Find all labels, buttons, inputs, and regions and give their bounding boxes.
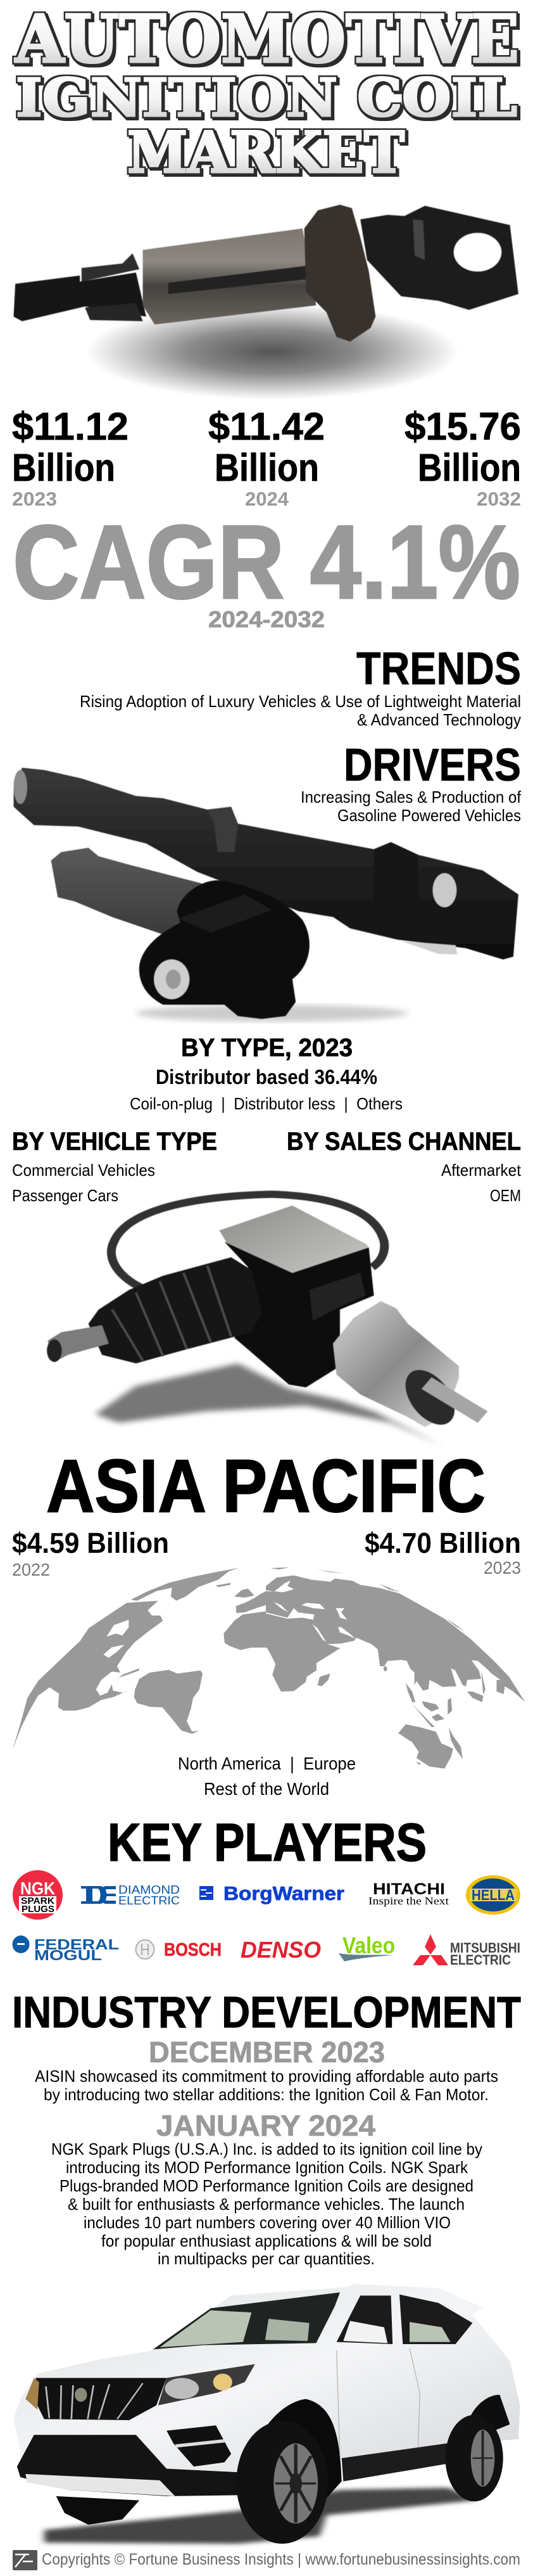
development: December 2023: by introducing two stellar additions: the Ignition Coil & Fan Motor. (44, 2085, 489, 2104)
development: December 2023 (35, 2036, 498, 2104)
key players heading: KEY PLAYERS (108, 1813, 427, 1872)
title: IGNITION COIL (16, 68, 517, 129)
logo: Diamond Electric (81, 1884, 180, 1907)
by type: Coil-on-plug | Distributor less | Others (130, 1094, 403, 1113)
image: white SUV (13, 2284, 520, 2544)
by vehicle type: Passenger Cars (12, 1186, 118, 1205)
stat: 2032: Billion (418, 446, 521, 489)
logo: Mitsubishi Electric: ELECTRIC (450, 1952, 511, 1968)
by vehicle type: BY VEHICLE TYPE (12, 1128, 217, 1156)
logo: Hella (466, 1875, 520, 1915)
logo: Federal Mogul (13, 1935, 119, 1963)
by vehicle type: Commercial Vehicles (12, 1161, 155, 1180)
by vehicle type (12, 1128, 217, 1205)
logo: NGK: NGK (20, 1878, 55, 1898)
by sales channel (287, 1128, 522, 1205)
development: January 2024: in multipacks per car quantities. (158, 2249, 375, 2268)
logo: Hitachi (368, 1880, 449, 1907)
development: January 2024: NGK Spark Plugs (U.S.A.) Inc. is added to its ignition coil line by (51, 2139, 482, 2158)
stat: 2023 (12, 405, 129, 510)
logo: Hitachi: HITACHI (373, 1880, 445, 1898)
development: January 2024: JANUARY 2024 (156, 2109, 375, 2142)
stat: 2032: 2032 (477, 488, 521, 510)
logo: Mitsubishi Electric: MITSUBISHI (450, 1940, 520, 1956)
logo: BorgWarner: BorgWarner (223, 1882, 344, 1904)
region heading: ASIA PACIFIC (46, 1444, 486, 1528)
region value 2022: 2022 (12, 1560, 50, 1579)
logo: Mitsubishi Electric (413, 1934, 520, 1968)
development: January 2024 (51, 2109, 482, 2268)
stat: 2023: Billion (12, 446, 115, 489)
title (15, 0, 519, 186)
region value 2023 (365, 1527, 521, 1578)
region value 2023: $4.70 Billion (365, 1527, 521, 1559)
stat: 2024: Billion (215, 446, 319, 489)
trends (80, 644, 521, 729)
title: AUTOMOTIVE (15, 0, 519, 78)
logo: Federal Mogul: MOGUL (34, 1947, 102, 1963)
region value 2022: $4.59 Billion (12, 1527, 169, 1559)
logo: Federal Mogul: FEDERAL (34, 1936, 119, 1953)
stat: 2024 (208, 405, 325, 510)
trends: & Advanced Technology (357, 710, 521, 729)
by type (130, 1034, 403, 1113)
logo: Bosch: BOSCH (164, 1940, 222, 1960)
logo: Diamond Electric: DIAMOND (118, 1884, 180, 1896)
by sales channel: OEM (490, 1186, 521, 1205)
other regions: Rest of the World (204, 1779, 329, 1799)
by sales channel: Aftermarket (441, 1161, 522, 1180)
image: ignition coil with shadow (13, 205, 518, 400)
drivers: Gasoline Powered Vehicles (337, 806, 521, 825)
image: two black ignition coils (13, 768, 518, 1022)
development: January 2024: includes 10 part numbers covering over 40 Million VIO (84, 2213, 451, 2232)
region value 2023: 2023 (484, 1558, 521, 1578)
drivers (301, 740, 522, 825)
logo: Hella: HELLA (472, 1887, 515, 1903)
stat: 2032 (404, 405, 521, 510)
development: December 2023: AISIN showcased its commitment to providing affordable auto parts (35, 2067, 498, 2086)
world map globe (13, 1567, 525, 1769)
by type: BY TYPE, 2023 (181, 1034, 353, 1062)
image: coil with cable and spark plug (47, 1194, 483, 1445)
logo: Denso: DENSO (241, 1937, 321, 1963)
logo: Hitachi: Inspire the Next (368, 1895, 449, 1907)
by type: Distributor based 36.44% (156, 1066, 377, 1088)
logo: Bosch (135, 1940, 222, 1960)
footer: logo (13, 2550, 37, 2570)
logo: Diamond Electric: ELECTRIC (118, 1894, 180, 1907)
region value 2022 (12, 1527, 169, 1579)
logo: Valeo: Valeo (342, 1932, 395, 1958)
development: January 2024: & built for enthusiasts & performance vehicles. The launch (68, 2195, 465, 2214)
logo: NGK: PLUGS (22, 1904, 54, 1915)
title: MARKET (127, 119, 404, 186)
other regions: North America | Europe (178, 1754, 356, 1773)
stat: 2024: $11.42 (208, 405, 325, 448)
development: January 2024: Plugs-branded MOD Performance Ignition Coils are designed (60, 2176, 473, 2195)
stat: 2032: $15.76 (404, 405, 521, 448)
CAGR: 2024-2032 (208, 606, 325, 632)
other regions (178, 1754, 356, 1799)
stat: 2024: 2024 (245, 488, 289, 510)
development: January 2024: introducing its MOD Performance Ignition Coils. NGK Spark (66, 2158, 468, 2177)
drivers: Increasing Sales & Production of (301, 787, 522, 807)
development: January 2024: for popular enthusiast applications & will be sold (101, 2231, 432, 2250)
stat: 2023: 2023 (12, 488, 57, 510)
stat: 2023: $11.12 (12, 405, 129, 448)
development: December 2023: DECEMBER 2023 (149, 2036, 385, 2069)
logo: NGK: SPARK (21, 1896, 54, 1906)
logo: NGK (13, 1870, 63, 1920)
